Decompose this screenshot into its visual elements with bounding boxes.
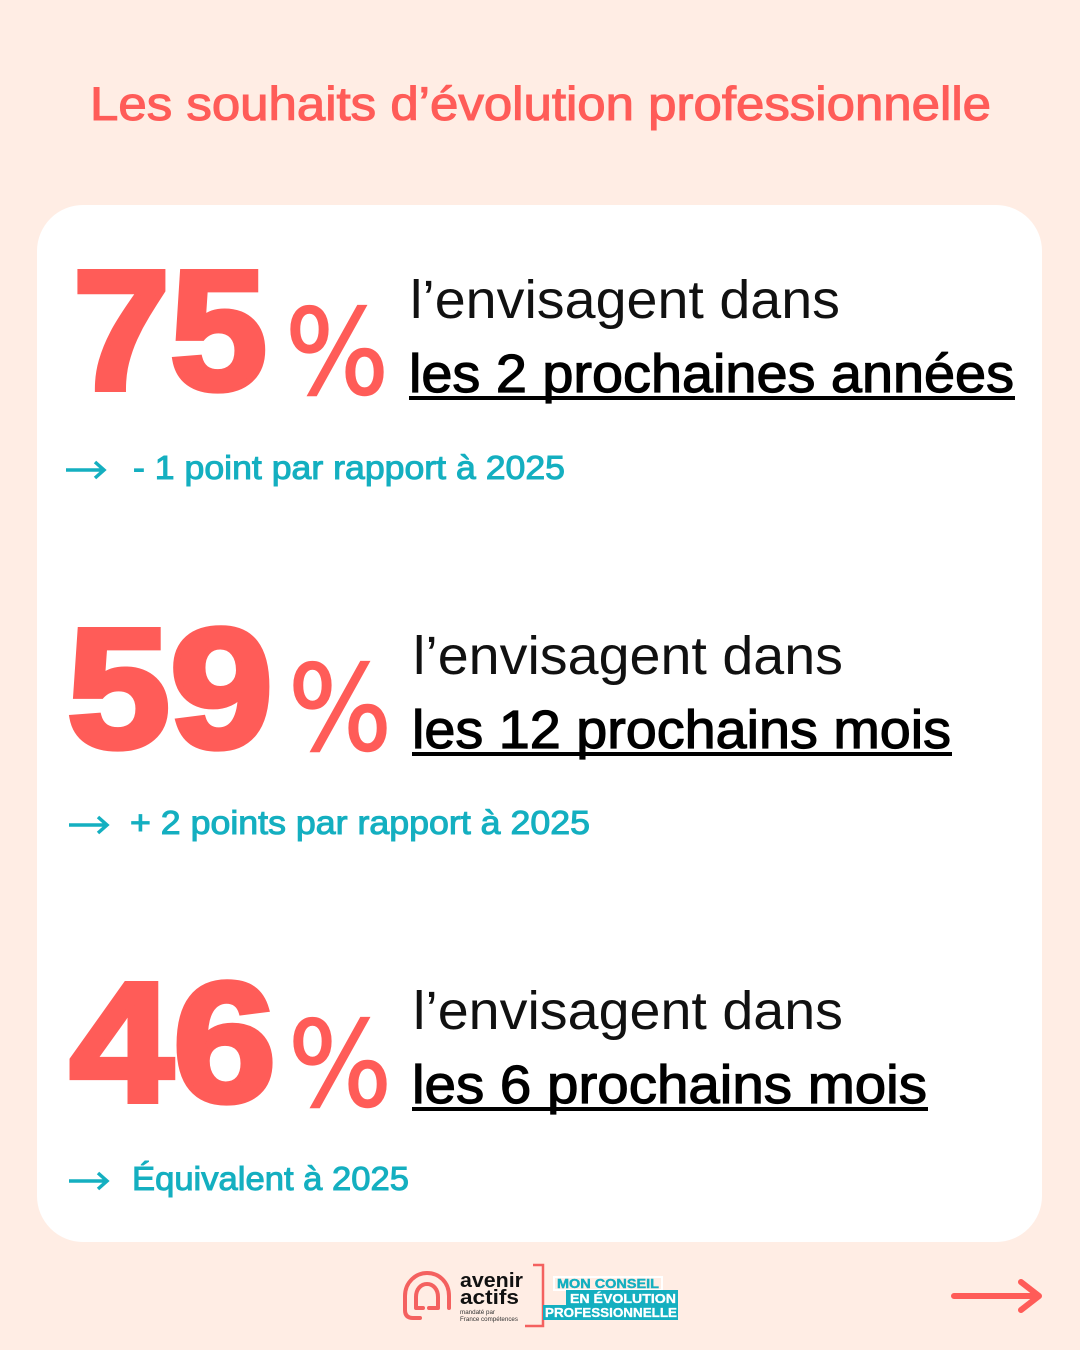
logo line 1: MON CONSEIL [557, 1276, 659, 1291]
emphasised period: les 6 prochains mois [412, 1055, 927, 1115]
logo caption: mandaté par [460, 1310, 495, 1316]
comparison note: - 1 point par rapport à 2025 [133, 449, 565, 486]
logo: avenir actifs: France compétences [460, 1317, 518, 1323]
logo line 3: PROFESSIONNELLE [545, 1305, 677, 1320]
statistic: 46% [69, 948, 928, 1197]
arrow [69, 817, 107, 833]
icon: arch [405, 1273, 449, 1318]
percent sign: % [288, 997, 392, 1135]
title: Les souhaits d’évolution professionnelle [90, 77, 991, 130]
bracket divider [525, 1265, 543, 1326]
logo name: avenir [460, 1270, 523, 1292]
lead text: l’envisagent dans [413, 626, 843, 686]
arrow [66, 462, 104, 478]
number 46: 46 [70, 948, 276, 1138]
logo: mon conseil [543, 1276, 678, 1320]
arrow [69, 1173, 107, 1189]
logo: avenir actifs: actifs [460, 1287, 519, 1309]
statistic: 75% [66, 236, 1015, 486]
arrow: next [954, 1282, 1039, 1310]
panel: statistics card [37, 205, 1042, 1242]
number 59: 59 [67, 594, 273, 784]
percent sign: % [285, 285, 389, 423]
number 75: 75 [73, 236, 267, 426]
comparison note: Équivalent à 2025 [132, 1160, 409, 1197]
lead text: l’envisagent dans [410, 270, 840, 330]
statistic: 59% [67, 594, 952, 841]
comparison note: + 2 points par rapport à 2025 [130, 804, 590, 841]
lead text: l’envisagent dans [413, 981, 843, 1041]
logo line 2: EN ÉVOLUTION [570, 1291, 676, 1306]
emphasised period: les 12 prochains mois [412, 700, 951, 760]
emphasised period: les 2 prochaines années [409, 344, 1014, 404]
percent sign: % [288, 641, 392, 779]
logo: avenir actifs [405, 1270, 523, 1323]
